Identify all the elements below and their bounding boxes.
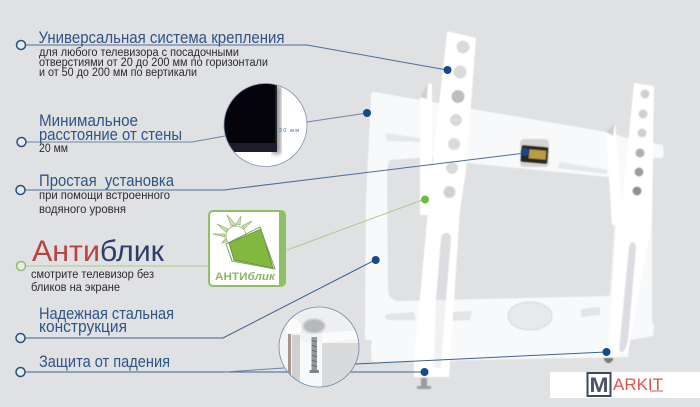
right small bracket arm <box>606 122 624 225</box>
magnifier: fall protection <box>279 307 361 388</box>
spirit level <box>520 139 549 167</box>
antiglare badge <box>209 211 285 286</box>
watermark logo <box>550 372 700 398</box>
text block: steel construction <box>39 304 174 336</box>
text block: antiglare: смотрите телевизор без <box>31 269 154 281</box>
text block: universal mounting: и от 50 до 200 мм по вертикали <box>39 67 197 79</box>
text block: minimum distance <box>39 111 182 155</box>
text block: antiglare: Антиблик <box>32 235 165 268</box>
text block: easy installation: при помощи встроенного <box>39 190 170 202</box>
text block: universal mounting: отверстиями от 20 до 200 мм по горизонтали <box>39 57 268 69</box>
watermark logo: ARKIT <box>613 375 663 394</box>
label: 20 mm: 20 мм <box>279 128 299 134</box>
text block: universal mounting: для любого телевизора с посадочными <box>39 47 239 59</box>
wall plate <box>365 92 664 362</box>
text block: fall protection: Защита от падения <box>39 352 170 371</box>
icon: screen <box>229 229 273 268</box>
text block: minimum distance: 20 мм <box>39 143 68 155</box>
text block: antiglare <box>31 235 165 294</box>
text block: easy installation <box>39 171 174 216</box>
text block: easy installation: водяного уровня <box>39 204 126 216</box>
badge label: АНТИблик <box>215 271 277 283</box>
watermark logo: M <box>590 374 608 397</box>
open circle markers <box>16 40 26 376</box>
text block: universal mounting <box>38 28 284 79</box>
bottom screws <box>417 378 431 389</box>
oval logo plate <box>508 302 552 330</box>
left small bracket arm <box>420 83 432 215</box>
leader lines <box>25 45 606 372</box>
text block: steel construction: конструкция <box>39 317 127 336</box>
text block: minimum distance: Минимальное <box>39 111 138 130</box>
right tall bracket <box>608 83 654 357</box>
text block: minimum distance: расстояние от стены <box>39 125 182 144</box>
text block: steel construction: Надежная стальная <box>39 304 174 323</box>
text block: antiglare: бликов на экране <box>31 282 120 294</box>
icon: sun <box>213 215 252 246</box>
left tall bracket <box>414 32 476 377</box>
text block: universal mounting: Универсальная система крепления <box>38 28 284 47</box>
text block: easy installation: Простая установка <box>39 171 174 190</box>
marker dots <box>363 66 610 376</box>
wall mount bracket <box>365 32 664 389</box>
magnifier: wall distance <box>220 80 307 166</box>
